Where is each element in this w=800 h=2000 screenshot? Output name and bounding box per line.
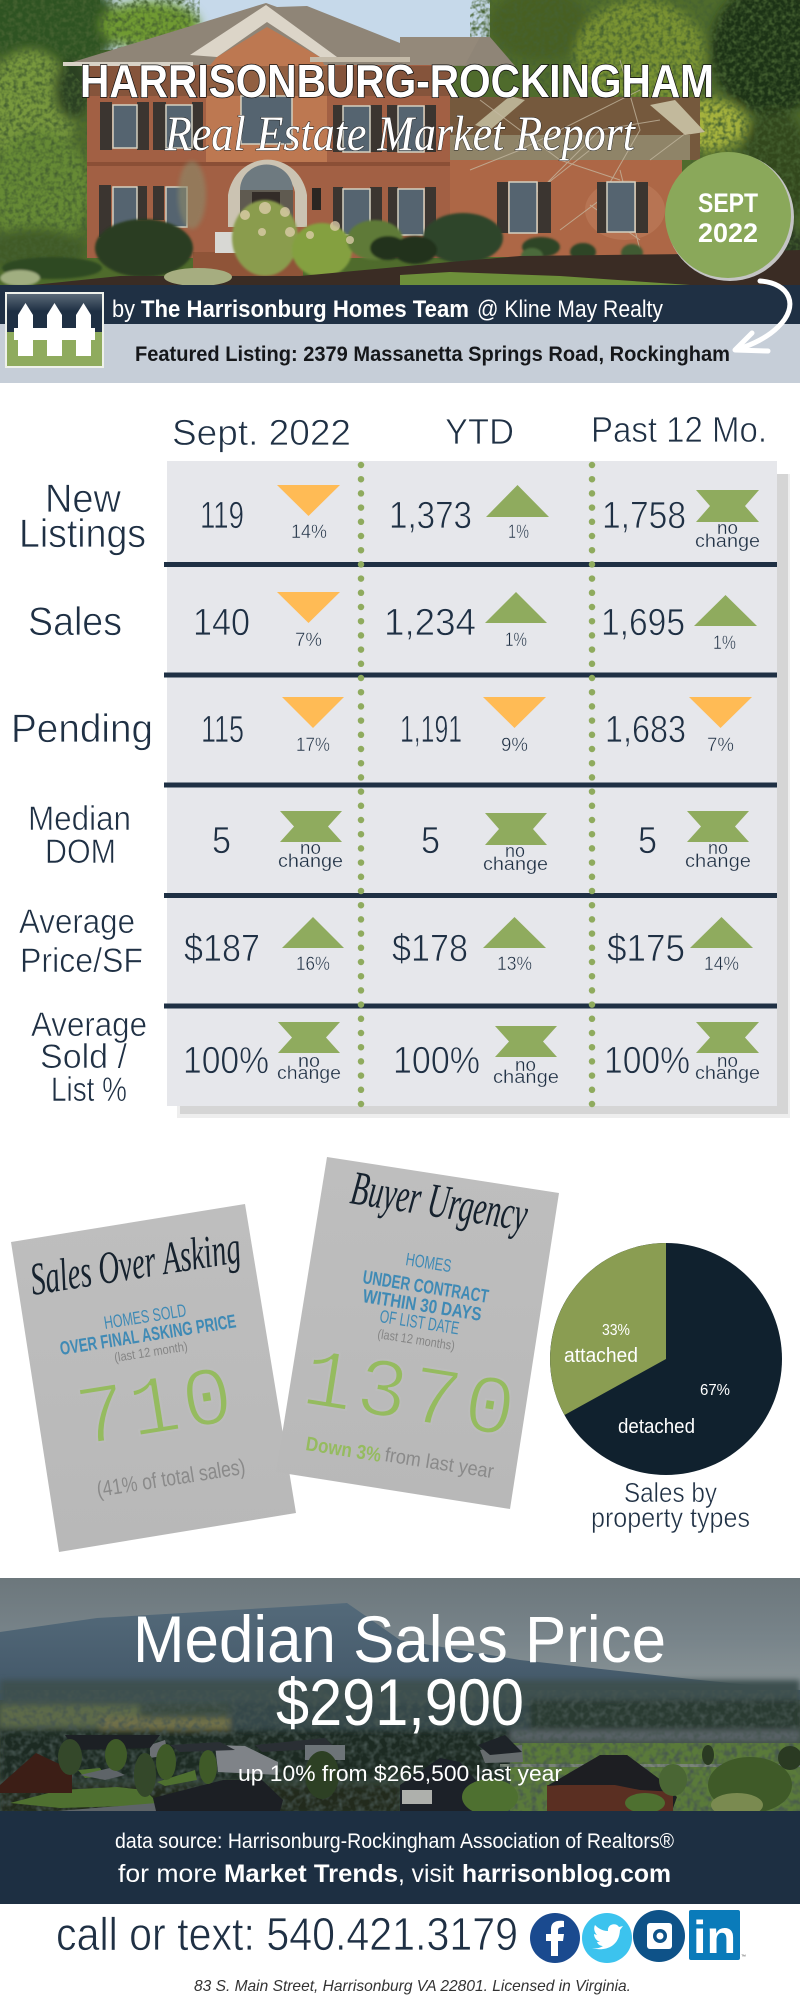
row: new listings: 14% [291,522,327,543]
navy byline bar: by [112,296,135,323]
row: average price per SF: Price/SF [20,942,143,980]
card: sales over asking: (last 12 month) [113,1339,189,1365]
card: buyer urgency: OF LIST DATE [378,1306,461,1338]
row: average sold to list percent: change [493,1067,559,1087]
card: buyer urgency: WITHIN 30 DAYS [361,1286,483,1326]
data source bar [0,1811,800,1904]
header photo: brick house [0,0,800,295]
row: new listings: Listings [19,512,146,556]
row: median DOM: no [505,841,525,861]
row: average sold to list percent: Sold / [40,1038,128,1076]
data source bar: data source: Harrisonburg-Rockingham Association of Realtors® [115,1830,674,1853]
row: pending: Pending [11,707,153,751]
card: sales over asking: OVER FINAL ASKING PRICE [58,1311,238,1360]
row: new listings: 119 [200,495,244,537]
row: average price per SF [19,903,753,980]
row: pending: 115 [201,709,244,751]
row: new listings: 1,373 [389,495,472,537]
row: average sold to list percent: Average [31,1006,147,1044]
navy byline bar: The Harrisonburg Homes Team [141,296,469,323]
card: sales over asking [11,1204,296,1552]
row: average price per SF: 13% [497,954,532,975]
table row dividers [164,562,777,1008]
call or text: call or text: 540.421.3179 [56,1908,518,1960]
row: median DOM: no [708,838,728,858]
row: average sold to list percent: no [717,1051,738,1071]
row: pending: 1,191 [400,709,462,751]
row: average price per SF: $178 [392,928,468,970]
card: sales over asking: (41% of total sales) [95,1454,247,1502]
column headings: YTD [445,411,514,452]
card: buyer urgency: 1370 [296,1335,521,1462]
row: pending: 17% [296,735,330,756]
row: new listings [19,477,760,556]
row: sales: 1,234 [384,602,476,644]
row: average sold to list percent: 100% [183,1040,269,1082]
median price photo: valley neighbourhood [0,1578,800,1817]
row: average sold to list percent: no [515,1055,536,1075]
row: sales: 1,695 [601,602,685,644]
featured listing bar [0,324,800,383]
subtitle script: Real Estate Market Report [164,105,636,161]
row: average sold to list percent [31,1006,760,1109]
icon: linkedin: ™ [741,1954,746,1960]
row: average sold to list percent: no [298,1051,320,1071]
row: median DOM: 5 [638,820,657,862]
date badge [665,152,794,281]
median sales price: $291,900 [276,1665,524,1739]
pie chart: sales by property types [550,1243,782,1475]
row: new listings: 1% [508,522,529,543]
card: sales over asking: 710 [70,1352,240,1471]
card: buyer urgency: UNDER CONTRACT [361,1267,490,1308]
date badge: 2022 [698,218,758,248]
row: new listings: New [45,477,121,521]
row: sales [28,592,757,654]
row: median DOM [28,800,751,874]
pie chart: sales by property types: 67% [700,1382,730,1399]
row: median DOM: Median [28,800,131,838]
stats table background [167,461,790,1118]
card: buyer urgency: Buyer Urgency [347,1162,532,1242]
row: sales: 1% [505,630,527,651]
row: median DOM: change [685,851,751,871]
data source bar: Market Trends [224,1860,398,1888]
date badge: SEPT [698,188,758,218]
row: median DOM: change [483,854,548,874]
card: buyer urgency: from last year [383,1444,496,1483]
row: average sold to list percent: change [695,1063,760,1083]
data source bar: , visit [398,1860,454,1888]
pie chart: sales by property types: attached [564,1345,638,1367]
column headings [172,409,767,453]
row: average sold to list percent: change [277,1063,341,1083]
row: average price per SF: Average [19,903,135,941]
card: sales over asking: Sales Over Asking [27,1221,244,1305]
median sales price [133,1602,666,1786]
median sales price: up 10% from $265,500 last year [238,1761,562,1786]
card: buyer urgency: Down 3% [304,1433,383,1467]
featured listing bar: Featured Listing: 2379 Massanetta Springs Road, Rockingham [135,343,730,366]
row: sales: 140 [193,602,250,644]
row: sales: Sales [28,600,122,644]
data source bar: for more [118,1860,217,1888]
data source bar: harrisonblog.com [462,1860,671,1888]
column separators [361,465,592,1107]
pie chart caption: Sales by [624,1477,717,1508]
column headings: Sept. 2022 [172,412,351,453]
icon: linkedin: in [693,1911,736,1963]
row: pending: 7% [707,735,734,756]
row: average sold to list percent: 100% [393,1040,480,1082]
card: buyer urgency [276,1157,559,1509]
column headings: Past 12 Mo. [591,409,767,450]
row: new listings: no [717,518,738,538]
row: pending [11,697,752,756]
row: pending: 1,683 [605,709,686,751]
median sales price: Median Sales Price [133,1602,666,1676]
icon: twitter [582,1913,632,1963]
title: HARRISONBURG-ROCKINGHAM [80,55,714,107]
row: sales: 7% [295,630,322,651]
row: average sold to list percent: List % [51,1071,127,1109]
card: buyer urgency: HOMES [404,1249,453,1276]
icon: instagram [633,1910,685,1962]
logo: white picket fence [5,292,104,368]
row: median DOM: 5 [212,820,231,862]
row: pending: 9% [501,735,528,756]
pie chart: sales by property types: detached [618,1416,695,1438]
address line: 83 S. Main Street, Harrisonburg VA 22801. Licensed in Virginia. [194,1978,631,1995]
row: average price per SF: 14% [704,954,739,975]
icon: facebook [530,1913,580,1963]
row: median DOM: DOM [45,833,116,871]
navy byline bar: @ Kline May Realty [477,296,663,323]
row: median DOM: change [278,851,343,871]
arrow to featured listing [735,281,790,351]
card: sales over asking: HOMES SOLD [102,1300,188,1333]
row: average price per SF: 16% [296,954,330,975]
pie chart caption [591,1477,750,1533]
row: new listings: change [695,531,760,551]
navy byline bar [0,285,800,324]
row: sales: 1% [713,633,736,654]
row: average price per SF: $175 [607,928,685,970]
row: median DOM: 5 [421,820,440,862]
pie chart caption: property types [591,1502,750,1533]
row: median DOM: no [300,838,321,858]
row: average sold to list percent: 100% [604,1040,690,1082]
row: average price per SF: $187 [184,928,260,970]
pie chart: sales by property types: 33% [602,1322,630,1339]
card: buyer urgency: (last 12 months) [377,1326,456,1353]
row: new listings: 1,758 [602,495,686,537]
